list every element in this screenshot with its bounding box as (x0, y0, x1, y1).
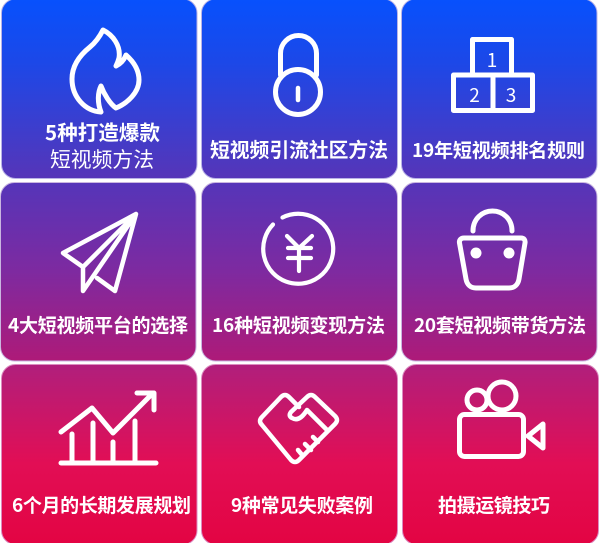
icon: video camera (460, 382, 543, 456)
card background (0, 182, 196, 361)
panel: 5种打造爆款短视频方法 (2, 0, 197, 178)
card background (2, 364, 197, 543)
heading: 9种常见失败案例 (231, 491, 373, 518)
icon: numbered blocks: 3 (506, 81, 516, 108)
icon: numbered blocks: 1 (487, 46, 497, 73)
card background (202, 364, 398, 543)
heading: 5种打造爆款 (45, 116, 160, 146)
panel: 4大短视频平台的选择 (0, 182, 196, 361)
panel: 19年短视频排名规则 (402, 0, 597, 178)
icon: padlock (276, 36, 320, 114)
card background (202, 0, 398, 178)
heading: 拍摄运镜技巧 (438, 491, 550, 518)
card background (402, 182, 597, 361)
panel: 短视频引流社区方法 (202, 0, 398, 178)
heading: 16种短视频变现方法 (212, 311, 385, 338)
heading: 20套短视频带货方法 (414, 311, 586, 338)
card background (402, 0, 597, 178)
panel: 20套短视频带货方法 (402, 182, 597, 361)
icon: numbered blocks: 2 (469, 81, 480, 108)
icon: flame (72, 30, 139, 112)
heading: 4大短视频平台的选择 (8, 311, 188, 338)
card background (202, 182, 398, 361)
panel: 16种短视频变现方法 (202, 182, 398, 361)
icon: handshake (260, 395, 337, 462)
icon: yen coin (263, 214, 333, 284)
panel: 9种常见失败案例 (202, 364, 398, 543)
panel: 拍摄运镜技巧 (402, 364, 598, 543)
card background (402, 364, 598, 543)
icon: shopping bag (459, 211, 525, 288)
panel: 6个月的长期发展规划 (2, 364, 197, 543)
card background (2, 0, 197, 178)
subheading: 短视频方法 (50, 143, 154, 173)
heading: 19年短视频排名规则 (412, 136, 585, 163)
heading: 6个月的长期发展规划 (12, 491, 191, 518)
icon: growth chart (61, 393, 156, 463)
icon: paper plane (63, 214, 136, 291)
icon: numbered blocks (454, 40, 532, 110)
heading: 短视频引流社区方法 (210, 134, 388, 163)
